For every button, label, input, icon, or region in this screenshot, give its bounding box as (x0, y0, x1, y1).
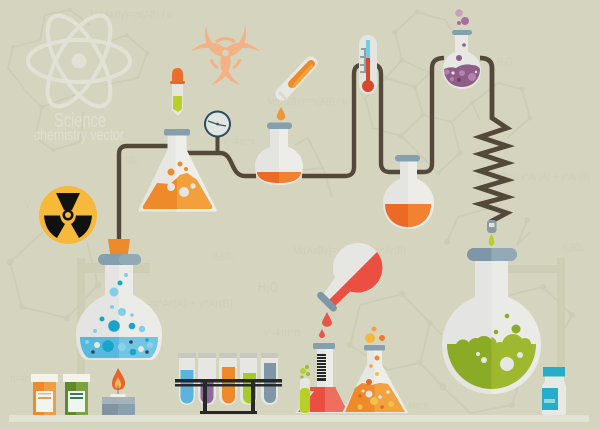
flask: orange conical (140, 129, 215, 210)
thermometer (359, 35, 377, 94)
icon: radiation sign (39, 186, 97, 244)
title text: Science (54, 110, 106, 132)
flask: purple with bubbles (443, 9, 481, 89)
background formulas: Mr(AxBy)=x*Ar(A) + y*Ar(B) (293, 245, 406, 257)
background formulas: Mn*n (408, 400, 428, 412)
flask: red pouring (316, 243, 383, 313)
icon: pressure gauge (204, 110, 231, 154)
icon: atom (28, 6, 130, 116)
test tube rack (175, 353, 282, 414)
background formulas: H₂SO₄ (562, 242, 583, 254)
background formulas: H₂O (497, 54, 512, 69)
background formulas: SO₂ (125, 155, 137, 167)
flask: orange conical right (342, 326, 408, 413)
medicine bottle green (63, 374, 90, 415)
background formulas: Mr(AxBy)=m(AB) / u (90, 9, 172, 21)
burner with flame (102, 368, 135, 415)
background formulas: V=Am*n (223, 136, 255, 148)
icon: nozzle (487, 220, 496, 246)
flask: round orange with flame (255, 107, 303, 185)
background formulas: n=m (10, 373, 30, 385)
medicine bottle orange (31, 374, 58, 415)
small test tube green (300, 365, 310, 414)
medicine bottle blue (542, 367, 566, 415)
flask: large blue (76, 239, 162, 360)
title text (34, 110, 125, 144)
icon: dropper (170, 68, 185, 116)
background formulas: H₂SO₄ (213, 251, 233, 263)
background formulas: =x*Ar(A) + y*Ar(B) (147, 298, 233, 310)
test tube: orange slanted (279, 63, 312, 100)
icon: biohazard (190, 25, 261, 86)
flask: red conical with barcode (295, 312, 351, 413)
background formulas: V (24, 199, 32, 211)
background lab stands (77, 258, 565, 376)
flask: large green (442, 248, 541, 394)
background formulas: H₂O (258, 279, 278, 296)
title text: chemistry vector (34, 127, 125, 144)
tubing network (119, 58, 507, 240)
flask: round orange lower (383, 155, 434, 229)
shelf (9, 415, 589, 422)
background formulas: V=km*n (263, 327, 300, 339)
background formulas: Mr(AxBy)=m(AB) / u (267, 96, 347, 108)
